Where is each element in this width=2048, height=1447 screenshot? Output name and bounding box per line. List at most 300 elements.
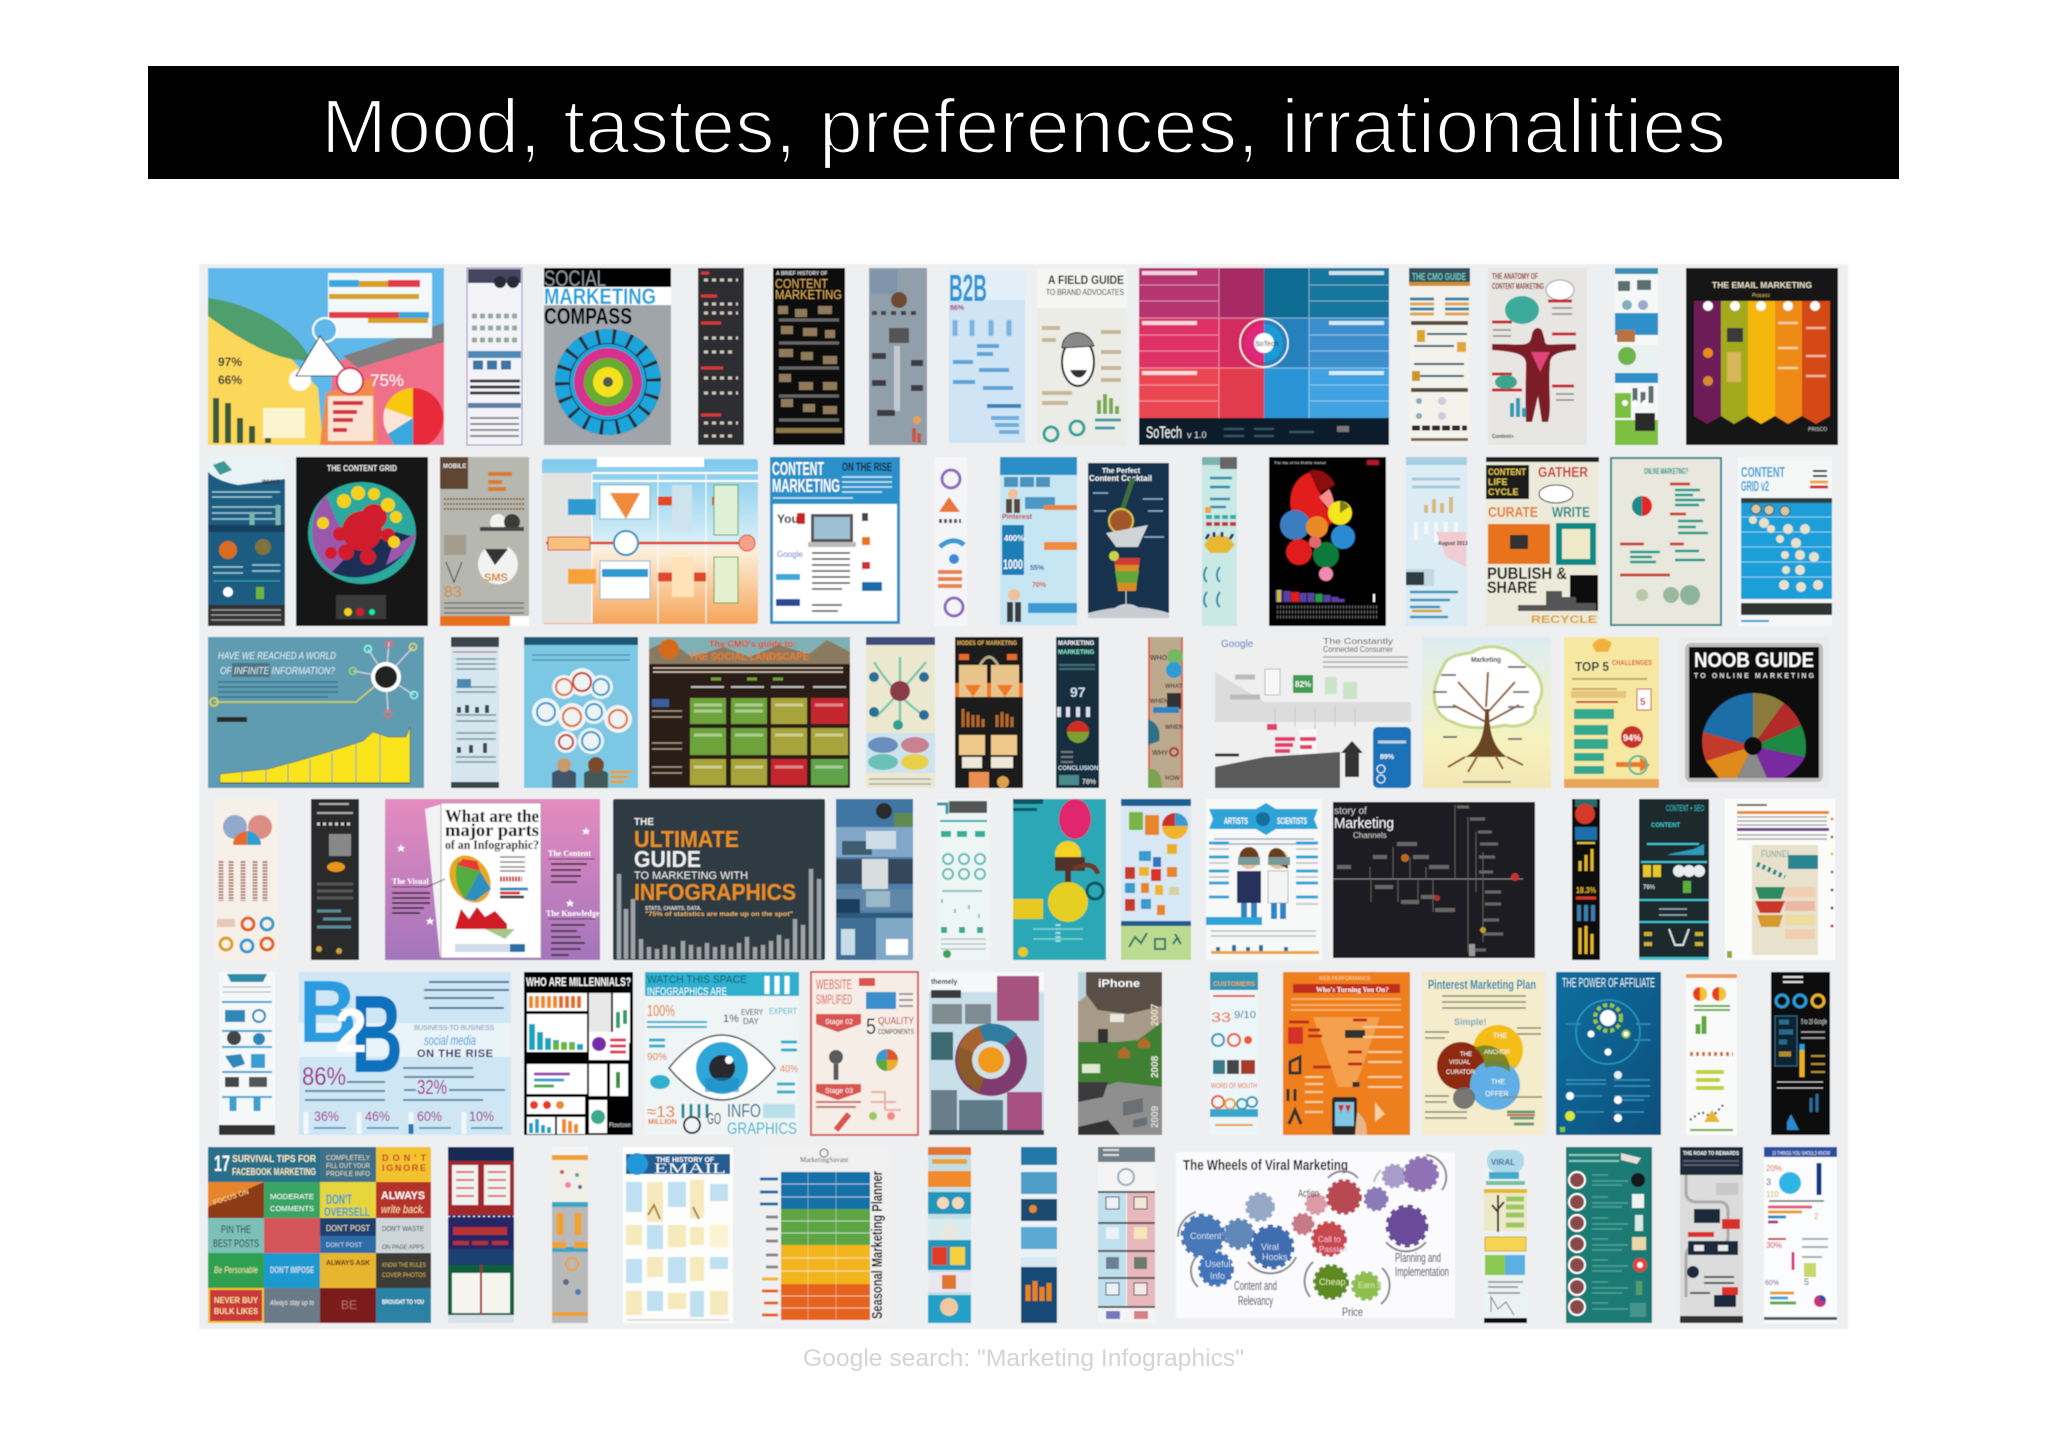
thumbnail: the CMO guide xyxy=(1409,268,1470,445)
thumbnail: SoTech framework: SoTech xyxy=(1146,423,1182,442)
thumbnail: the history of email xyxy=(623,1147,733,1323)
thumbnail: 17 survival tips for facebook marketing: ON PAGE APPS xyxy=(382,1245,424,1251)
thumbnail: content grid v2: GRID v2 xyxy=(1741,478,1769,495)
thumbnail: ultimate guide to marketing with infographics: THE xyxy=(634,817,654,828)
thumbnail: tips for online business xyxy=(1764,1147,1837,1323)
thumbnail: B2B social media tall: 86% xyxy=(950,305,965,312)
thumbnail: pinterest marketing plan xyxy=(1422,972,1545,1135)
thumbnail: mobile marketing: MOBILE xyxy=(443,464,466,470)
thumbnail: 17 survival tips for facebook marketing: PIN THE xyxy=(221,1224,251,1236)
thumbnail: pinterest marketing plan: THE xyxy=(1460,1052,1472,1058)
thumbnail: the constantly connected consumer: Connected Consumer xyxy=(1323,645,1393,654)
thumbnail: 17 survival tips for facebook marketing: NEVER BUY xyxy=(214,1296,259,1305)
thumbnail: the iPhone: 2008 xyxy=(1150,1055,1161,1078)
thumbnail: B2B social media on the rise: 32% xyxy=(417,1077,447,1099)
thumbnail: pale blue data sheet: August 2013 xyxy=(1438,541,1468,547)
thumbnail: web analytics map xyxy=(542,457,758,624)
thumbnail: B2B social media on the rise: B xyxy=(299,962,357,1061)
thumbnail: anatomy of content marketing xyxy=(1488,268,1587,445)
thumbnail: 17 survival tips for facebook marketing: DON'T xyxy=(326,1191,352,1207)
thumbnail: road to rewards xyxy=(1680,1147,1743,1323)
thumbnail: who what when where why: WHEN xyxy=(1165,725,1183,731)
thumbnail: world of infinite information: HAVE WE REACHED A WORLD xyxy=(218,651,336,662)
thumbnail: ultimate guide to marketing with infographics: INFOGRAPHICS xyxy=(634,879,796,905)
thumbnail: watch this space infographics: GO xyxy=(707,1111,721,1128)
thumbnail: 17 survival tips for facebook marketing: DON'T POST xyxy=(326,1224,370,1233)
thumbnail: how social is b2b: 400% xyxy=(1004,534,1024,543)
thumbnail: the wheels of viral marketing: The Wheels of Viral Marketing xyxy=(1183,1157,1348,1174)
thumbnail: 17 survival tips for facebook marketing: KNOW THE RULES xyxy=(382,1263,426,1269)
thumbnail: 17 survival tips for facebook marketing: Always stay up to xyxy=(269,1300,314,1307)
thumbnail: mobile marketing: SMS xyxy=(484,572,508,584)
thumbnail: what are the major parts of an infographic xyxy=(385,799,600,960)
thumbnail: watch this space infographics: 100% xyxy=(647,1003,675,1020)
thumbnail: watch this space infographics: 40% xyxy=(780,1064,798,1075)
thumbnail: B2B social media on the rise: 60% xyxy=(417,1108,442,1124)
thumbnail: slate blue infographic xyxy=(869,268,927,445)
thumbnail: the constantly connected consumer: Google xyxy=(1221,639,1254,650)
thumbnail: 17 survival tips for facebook marketing: BULK LIKES xyxy=(214,1307,259,1316)
thumbnail: themely content wheel: themely xyxy=(931,979,958,986)
thumbnail: 17 survival tips for facebook marketing: MODERATE xyxy=(270,1194,314,1201)
thumbnail: Social Marketing Compass: COMPASS xyxy=(544,303,632,329)
thumbnail: seasonal marketing planner xyxy=(760,1147,892,1323)
thumbnail: the wheels of viral marketing: Price xyxy=(1342,1305,1363,1319)
thumbnail: the constantly connected consumer xyxy=(1215,637,1411,788)
thumbnail: website simplified: WEBSITE xyxy=(816,976,852,992)
thumbnail: who what when where why: WHO xyxy=(1150,655,1168,662)
thumbnail: narrow blue data xyxy=(1021,1147,1057,1323)
thumbnail: watch this space infographics: 1% xyxy=(723,1013,739,1025)
thumbnail: watch this space infographics: 90% xyxy=(647,1052,667,1063)
thumbnail: content life cycle: CURATE xyxy=(1488,504,1538,521)
thumbnail: the wheels of viral marketing: Action xyxy=(1298,1188,1319,1200)
thumbnail: what are the major parts of an infographic: The Content xyxy=(548,849,591,858)
thumbnail: who's turning you on xyxy=(1283,972,1410,1135)
thumbnail: narrow dark yellow bars: 18.3% xyxy=(1576,886,1596,895)
thumbnail: artists vs scientists: ARTISTS xyxy=(1224,816,1248,826)
thumbnail: content marketing on the rise: CONTENT xyxy=(772,459,824,479)
thumbnail: the perfect content cocktail: Content Cocktail xyxy=(1089,474,1152,483)
thumbnail: B2B social media on the rise: social media xyxy=(424,1032,476,1048)
thumbnail: purple bordered infographic xyxy=(467,268,522,445)
thumbnail: 17 survival tips for facebook marketing: DON'T xyxy=(382,1153,426,1163)
thumbnail: internet data dark xyxy=(1056,637,1099,788)
thumbnail: black bubble pies xyxy=(1269,457,1386,626)
thumbnail: website simplified xyxy=(811,972,918,1135)
thumbnail: the email marketing process: Process xyxy=(1752,293,1771,299)
thumbnail: content + seo xyxy=(1639,799,1709,960)
thumbnail: narrow dark yellow bars xyxy=(1572,799,1600,960)
thumbnail: tips for online business: 110 xyxy=(1766,1190,1779,1199)
thumbnail: content marketing on the rise: Google xyxy=(777,550,803,559)
thumbnail: top 5 challenges: 94% xyxy=(1623,733,1641,743)
thumbnail: content + seo: 76% xyxy=(1643,885,1656,891)
thumbnail: history of marketing channels: Marketing xyxy=(1334,815,1394,832)
thumbnail: who are millennials xyxy=(524,972,633,1135)
thumbnail: 17 survival tips for facebook marketing: ALWAYS ASK xyxy=(326,1260,370,1267)
thumbnail: what are the major parts of an infographic: of an Infographic? xyxy=(445,837,539,852)
thumbnail: anatomy of content marketing: THE ANATOMY OF xyxy=(1492,272,1538,281)
thumbnail: the constantly connected consumer: The Constantly xyxy=(1323,637,1393,646)
thumbnail: watch this space infographics: INFO xyxy=(727,1101,761,1121)
thumbnail: top 5 challenges: TOP 5 xyxy=(1575,659,1609,674)
thumbnail: anatomy of content marketing: CONTENT MARKETING xyxy=(1492,282,1544,291)
thumbnail: marketing trifecta: 75% xyxy=(370,371,404,390)
thumbnail: ultimate guide to marketing with infographics: STATS. CHARTS. DATA. xyxy=(645,906,702,912)
thumbnail: Social Marketing Compass xyxy=(544,266,671,445)
thumbnail: CMO's guide to the social landscape: THE SOCIAL LANDSCAPE xyxy=(689,651,809,663)
thumbnail: 17 survival tips for facebook marketing: BROUGHT TO YOU xyxy=(382,1300,424,1306)
thumbnail: field guide to brand advocates: A FIELD GUIDE xyxy=(1048,273,1124,287)
thumbnail: anatomy of content marketing: Content+ xyxy=(1492,434,1514,440)
thumbnail: the wheels of viral marketing: Hooks xyxy=(1262,1252,1288,1262)
thumbnail: the perfect content cocktail xyxy=(1088,463,1169,618)
thumbnail: ultimate guide to marketing with infographics: "75% of statistics are made up on the spot" xyxy=(645,912,793,918)
thumbnail: website simplified: COMPONENTS xyxy=(878,1029,914,1036)
thumbnail: field guide to brand advocates xyxy=(1037,268,1127,445)
thumbnail: internet data dark: 97 xyxy=(1070,684,1086,700)
thumbnail: the constantly connected consumer: 82% xyxy=(1295,680,1311,689)
thumbnail: the email marketing process: THE EMAIL MARKETING xyxy=(1712,281,1812,290)
thumbnail: who what when where why: WHAT xyxy=(1165,684,1183,690)
thumbnail: 17 survival tips for facebook marketing: DON'T IMPOSE xyxy=(270,1265,314,1275)
thumbnail: watch this space infographics: ≈13 xyxy=(647,1104,675,1121)
thumbnail: who's turning you on: Who's Turning You On? xyxy=(1316,986,1389,994)
thumbnail: tips for online business: 30% xyxy=(1766,1241,1782,1250)
thumbnail: pinterest marketing plan: Simple! xyxy=(1454,1017,1487,1027)
thumbnail: ultimate guide to marketing with infographics: GUIDE xyxy=(634,846,701,872)
thumbnail: 17 survival tips for facebook marketing: BEST POSTS xyxy=(213,1238,259,1250)
thumbnail: the iPhone: 2007 xyxy=(1150,1003,1161,1026)
thumbnail: 17 survival tips for facebook marketing: IGNORE xyxy=(382,1163,426,1173)
thumbnail: content life cycle xyxy=(1486,457,1599,626)
thumbnail: SoTech framework: v 1.0 xyxy=(1187,430,1207,440)
thumbnail: website simplified: QUALITY xyxy=(878,1016,914,1027)
thumbnail: email marketing guide xyxy=(451,637,499,788)
thumbnail: who what when where why: WHY xyxy=(1152,750,1169,757)
thumbnail: why blue ocean: WHY? xyxy=(262,480,280,486)
thumbnail: the iPhone: 2009 xyxy=(1150,1105,1161,1128)
thumbnail: 17 survival tips for facebook marketing: DON'T POST xyxy=(326,1243,362,1249)
thumbnail: the wheels of viral marketing: Useful xyxy=(1205,1259,1231,1269)
thumbnail: watch this space infographics: GRAPHICS xyxy=(727,1119,797,1138)
thumbnail: the wheels of viral marketing: Passion xyxy=(1319,1245,1347,1254)
thumbnail: B2B social media tall: B2B xyxy=(949,268,987,310)
thumbnail: tips for online business: 10 THINGS YOU SHOULD KNOW xyxy=(1772,1151,1830,1157)
thumbnail: content life cycle: WRITE xyxy=(1552,504,1590,521)
thumbnail: narrow aqua xyxy=(1202,457,1237,626)
thumbnail: top 5 challenges: CHALLENGES xyxy=(1612,660,1652,667)
thumbnail: 17 survival tips for facebook marketing: COVER PHOTOS xyxy=(382,1273,426,1279)
thumbnail: marketing trifecta: 66% xyxy=(218,373,242,387)
thumbnail: B2B social media tall xyxy=(949,268,1025,443)
thumbnail: pinterest marketing plan: CURATOR xyxy=(1446,1070,1476,1076)
thumbnail: noob guide to online marketing: NOOB GUIDE xyxy=(1694,649,1814,672)
thumbnail: black bubble pies: The rise of the Mobile market xyxy=(1274,460,1327,465)
thumbnail: the wheels of viral marketing: Content xyxy=(1190,1231,1222,1241)
thumbnail: the wheels of viral marketing: Call to xyxy=(1318,1235,1341,1244)
thumbnail: seasonal marketing planner: Seasonal Marketing Planner xyxy=(869,1171,886,1319)
thumbnail: history of content marketing: MARKETING xyxy=(775,287,842,302)
thumbnail: black data rings xyxy=(1771,972,1830,1135)
thumbnail: history of marketing channels xyxy=(1333,802,1535,958)
thumbnail: what are the major parts of an infographic: The Visual xyxy=(392,877,429,886)
thumbnail: atoms data xyxy=(866,637,935,788)
thumbnail: content marketing on the rise: ON THE RISE xyxy=(842,460,892,474)
thumbnail: ultimate guide to marketing with infographics xyxy=(613,799,825,960)
thumbnail: content life cycle: PUBLISH & xyxy=(1487,564,1567,583)
thumbnail: content life cycle: CONTENT xyxy=(1488,467,1526,477)
thumbnail: history of content marketing xyxy=(773,268,845,445)
thumbnail: 17 survival tips for facebook marketing xyxy=(208,1147,431,1323)
thumbnail: blue photo collage xyxy=(836,799,913,960)
thumbnail: tips for online business: 60% xyxy=(1765,1280,1779,1287)
thumbnail: noob guide to online marketing: TO ONLINE MARKETING xyxy=(1694,673,1815,680)
thumbnail: colorful data xyxy=(215,799,278,960)
thumbnail: how social is b2b: 55% xyxy=(1030,565,1045,572)
thumbnail: internet data dark: 78% xyxy=(1082,779,1096,786)
thumbnail: 17 survival tips for facebook marketing: PROFILE INFO xyxy=(326,1171,370,1178)
thumbnail: what are the major parts of an infographic: The Knowledge xyxy=(546,909,600,918)
thumbnail: 17 survival tips for facebook marketing: write back. xyxy=(381,1204,425,1216)
thumbnail: 17 survival tips for facebook marketing: OVERSELL xyxy=(324,1205,370,1219)
thumbnail: pale blue data sheet xyxy=(1406,457,1468,626)
thumbnail: 17 survival tips for facebook marketing: COMPLETELY xyxy=(326,1155,370,1162)
thumbnail: history of content marketing: CONTENT xyxy=(775,276,828,291)
thumbnail: narrow purple rings xyxy=(934,457,967,626)
thumbnail: website simplified: Stage 03 xyxy=(825,1088,853,1095)
thumbnail: history of content marketing: A BRIEF HISTORY OF xyxy=(776,271,827,277)
thumbnail: internet marketing tree: Marketing xyxy=(1471,657,1501,664)
thumbnail: who what when where why: HOW xyxy=(1165,776,1180,782)
thumbnail: going viral: VIRAL xyxy=(1491,1158,1515,1167)
thumbnail: customer word of mouth: CUSTOMERS xyxy=(1213,982,1255,988)
thumbnail: the wheels of viral marketing: Info xyxy=(1210,1271,1225,1281)
thumbnail: watch this space infographics: EVERY xyxy=(741,1008,764,1017)
thumbnail: internet marketing tree xyxy=(1423,637,1551,788)
thumbnail: B2B social media on the rise: 86% xyxy=(302,1063,346,1091)
thumbnail: inbound marketing teal xyxy=(1013,799,1106,960)
thumbnail: content marketing the game xyxy=(1121,799,1191,960)
thumbnail: the wheels of viral marketing: Cheap xyxy=(1319,1277,1346,1287)
thumbnail: content grid v2: CONTENT xyxy=(1741,464,1785,481)
thumbnail: the email marketing process xyxy=(1686,268,1838,445)
thumbnail: the CMO guide: THE CMO GUIDE xyxy=(1412,272,1466,283)
thumbnail: marketing trifecta: 97% xyxy=(218,355,242,369)
thumbnail: B2B social media on the rise: BUSINESS-TO-BUSINESS xyxy=(414,1025,494,1032)
thumbnail: the email marketing process: PRISCO xyxy=(1808,427,1827,433)
thumbnail: dark timeline xyxy=(698,268,744,445)
thumbnail: black data rings: 5 to 20 Google xyxy=(1801,1019,1827,1026)
thumbnail: world of infinite information xyxy=(208,637,424,788)
thumbnail: the wheels of viral marketing: Viral xyxy=(1261,1242,1279,1252)
thumbnail: themely content wheel xyxy=(929,972,1044,1135)
thumbnail: CMO's guide to the social landscape: The CMO's guide to: xyxy=(709,639,796,649)
title bar xyxy=(148,66,1899,179)
thumbnail: tips for online business: 2 xyxy=(1814,1212,1819,1221)
thumbnail: pinterest marketing plan: OFFER xyxy=(1485,1091,1509,1098)
thumbnail: content life cycle: LIFE xyxy=(1488,477,1508,487)
thumbnail: internet data dark: MARKETING xyxy=(1058,641,1095,647)
thumbnail: narrow grey with orange xyxy=(552,1147,588,1323)
thumbnail: the wheels of viral marketing: Planning and xyxy=(1395,1250,1441,1265)
thumbnail: teal bordered data: ONLINE MARKETING? xyxy=(1644,467,1688,476)
thumbnail: watch this space infographics: EXPERT xyxy=(769,1007,797,1016)
thumbnail: the perfect content cocktail: The Perfect xyxy=(1102,468,1141,475)
thumbnail: content life cycle: SHARE xyxy=(1487,578,1537,597)
panel: Google image results grid xyxy=(199,264,1848,1329)
thumbnail: pinterest marketing plan: VISUAL xyxy=(1449,1060,1471,1066)
thumbnail: top 5 challenges: 5 xyxy=(1640,697,1646,708)
thumbnail: 17 survival tips for facebook marketing: SURVIVAL TIPS FOR xyxy=(232,1154,317,1165)
thumbnail: who are millennials: WHO ARE MILLENNIALS? xyxy=(526,975,631,989)
thumbnail: inside the minds xyxy=(524,637,638,788)
thumbnail: website simplified: Stage 02 xyxy=(825,1019,853,1026)
thumbnail: B2B social media on the rise: 36% xyxy=(314,1108,339,1124)
thumbnail: customer word of mouth: 33 xyxy=(1211,1009,1231,1025)
thumbnail: the history of email: THE HISTORY OF xyxy=(656,1157,715,1164)
thumbnail: customer word of mouth xyxy=(1210,972,1258,1135)
thumbnail: pinterest marketing plan: THE xyxy=(1491,1079,1505,1086)
thumbnail: customer word of mouth: WORD OF MOUTH xyxy=(1211,1083,1257,1090)
thumbnail: field guide to brand advocates: TO BRAND ADVOCATES xyxy=(1046,288,1124,297)
thumbnail: content marketing on the rise: You xyxy=(777,512,799,526)
thumbnail: how social is b2b: 1000 xyxy=(1003,556,1023,572)
thumbnail: Social Marketing Compass: MARKETING xyxy=(544,284,656,309)
thumbnail: noob guide to online marketing xyxy=(1679,637,1829,788)
thumbnail: content life cycle: CYCLE xyxy=(1488,487,1519,497)
thumbnail: watch this space infographics: INFOGRAPHICS ARE xyxy=(647,986,727,998)
thumbnail: content + seo: CONTENT + SEO xyxy=(1666,804,1704,813)
thumbnail: 17 survival tips for facebook marketing: 17 xyxy=(214,1151,230,1176)
thumbnail: how social is b2b: Pinterest xyxy=(1002,514,1033,521)
thumbnail: 17 survival tips for facebook marketing: COMMENTS xyxy=(270,1206,314,1213)
thumbnail: pinterest marketing plan: ANCHOR xyxy=(1484,1050,1511,1056)
thumbnail: the content grid: THE CONTENT GRID xyxy=(327,464,397,473)
thumbnail: teal bordered data xyxy=(1611,458,1721,625)
thumbnail: watch this space infographics: MILLION xyxy=(648,1119,677,1126)
thumbnail: pinterest marketing plan: THE xyxy=(1493,1033,1507,1040)
thumbnail: the iPhone xyxy=(1078,972,1162,1135)
thumbnail: the wheels of viral marketing xyxy=(1176,1152,1455,1319)
thumbnail: 17 survival tips for facebook marketing: FACEBOOK MARKETING xyxy=(232,1167,316,1178)
thumbnail: pale teal xyxy=(937,799,990,960)
thumbnail: white charts xyxy=(1686,972,1737,1135)
thumbnail: watch this space infographics: DAY xyxy=(743,1017,760,1026)
thumbnail: ultimate guide to marketing with infographics: ULTIMATE xyxy=(634,826,739,852)
thumbnail: how social is b2b: 70% xyxy=(1032,582,1047,589)
thumbnail: who what when where why: WHEN xyxy=(1150,699,1168,705)
thumbnail: modes of marketing: MODES OF MARKETING xyxy=(957,641,1017,647)
thumbnail: the wheels of viral marketing: Earn $ xyxy=(1358,1281,1382,1290)
thumbnail: what are the major parts of an infographic: major parts xyxy=(445,820,539,840)
thumbnail: the power of affiliate xyxy=(1556,972,1661,1135)
thumbnail: funnel marketing model: FUNNEL xyxy=(1761,849,1791,859)
thumbnail: the history of email: EMAIL xyxy=(654,1161,726,1177)
thumbnail: watch this space infographics xyxy=(645,972,799,1138)
thumbnail: CMO's guide to the social landscape xyxy=(649,637,850,788)
thumbnail: website simplified: SIMPLIFIED xyxy=(816,991,852,1007)
thumbnail: history of marketing channels: story of xyxy=(1334,806,1367,817)
thumbnail: artists vs scientists xyxy=(1206,799,1322,960)
thumbnail: why blue ocean xyxy=(208,457,285,626)
heading: What are the xyxy=(445,806,539,826)
thumbnail: split blue pink comparison xyxy=(1098,1147,1155,1323)
thumbnail: B2B social media on the rise: 46% xyxy=(365,1108,390,1124)
thumbnail: content life cycle: GATHER xyxy=(1538,464,1588,481)
thumbnail: 17 survival tips for facebook marketing: DON'T WASTE xyxy=(382,1226,424,1233)
thumbnail: narrow orange teal xyxy=(928,1147,971,1323)
thumbnail: who are millennials: Flowtown xyxy=(609,1123,631,1129)
thumbnail: watch this space infographics: WATCH THIS SPACE xyxy=(647,974,747,986)
thumbnail: mobile marketing xyxy=(440,457,529,626)
thumbnail: website simplified: 5 xyxy=(866,1014,876,1039)
thumbnail: the wheels of viral marketing: Relevancy xyxy=(1238,1293,1273,1308)
thumbnail: artists vs scientists: SCIENTISTS xyxy=(1277,816,1307,826)
thumbnail: 17 survival tips for facebook marketing: Be Personable xyxy=(214,1265,258,1275)
thumbnail: content marketing on the rise xyxy=(770,457,900,624)
thumbnail: content + seo: CONTENT xyxy=(1651,823,1680,829)
thumbnail: content marketing on the rise: MARKETING xyxy=(772,476,840,496)
thumbnail: teal timeline circles xyxy=(1566,1147,1652,1323)
thumbnail: going viral xyxy=(1484,1147,1527,1323)
thumbnail: 17 survival tips for facebook marketing: ALWAYS xyxy=(381,1190,425,1202)
thumbnail: Social Marketing Compass: SOCIAL xyxy=(544,266,606,291)
thumbnail: dark infographic with orange xyxy=(311,799,359,960)
thumbnail: who what when where why xyxy=(1148,637,1183,788)
thumbnail: B2B social media on the rise: 10% xyxy=(469,1108,494,1124)
thumbnail: the power of affiliate: THE POWER OF AFFILIATE xyxy=(1562,975,1655,990)
thumbnail: marketing trifecta xyxy=(208,268,444,445)
thumbnail: blue survey xyxy=(219,972,275,1135)
thumbnail: modes of marketing xyxy=(955,637,1023,788)
thumbnail: tips for online business: 3 xyxy=(1766,1177,1771,1187)
thumbnail: how social is b2b xyxy=(1000,457,1077,625)
thumbnail: 17 survival tips for facebook marketing: BE xyxy=(341,1298,357,1312)
thumbnail: SoTech framework: SoTech xyxy=(1255,341,1278,348)
thumbnail: road to rewards: THE ROAD TO REWARDS xyxy=(1683,1151,1740,1157)
thumbnail: mobile marketing: 83 xyxy=(444,584,462,601)
thumbnail: B2B social media on the rise xyxy=(299,962,511,1135)
thumbnail: content life cycle: RECYCLE xyxy=(1531,614,1597,626)
thumbnail: the content grid xyxy=(296,457,428,626)
thumbnail: internet data dark: MARKETING xyxy=(1058,650,1095,656)
thumbnail: pinterest marketing plan: Pinterest Marketing Plan xyxy=(1428,977,1536,992)
thumbnail: ultimate guide to marketing with infographics: TO MARKETING WITH xyxy=(634,870,748,882)
thumbnail: history of marketing channels: Channels xyxy=(1353,831,1387,840)
thumbnail: world of infinite information: OF INFINITE INFORMATION? xyxy=(220,666,335,677)
thumbnail: tips for online business: 20% xyxy=(1766,1164,1782,1173)
thumbnail: green and blue tall xyxy=(1615,268,1658,445)
thumbnail: seasonal marketing planner: MarketingSavant xyxy=(800,1156,848,1164)
title: Mood, tastes, preferences, irrationalities xyxy=(321,84,1726,170)
thumbnail: top 5 challenges xyxy=(1564,637,1659,788)
thumbnail: the constantly connected consumer: 89% xyxy=(1380,754,1395,761)
thumbnail: internet data dark: CONCLUSION xyxy=(1058,766,1098,772)
thumbnail: customer word of mouth: 9/10 xyxy=(1234,1010,1256,1021)
caption: Google search: "Marketing Infographics" xyxy=(803,1345,1244,1372)
thumbnail: the wheels of viral marketing: Implementation xyxy=(1395,1264,1449,1279)
thumbnail: content grid v2 xyxy=(1738,457,1832,626)
thumbnail: B2B social media on the rise: ON THE RISE xyxy=(417,1048,493,1060)
thumbnail: who's turning you on: WEB PERFORMANCE xyxy=(1319,976,1371,982)
thumbnail: funnel marketing model xyxy=(1725,799,1835,960)
thumbnail: the iPhone: iPhone xyxy=(1098,978,1140,990)
thumbnail: navy red green poster xyxy=(448,1147,514,1323)
thumbnail: B2B social media on the rise: B xyxy=(351,973,403,1096)
thumbnail: 17 survival tips for facebook marketing: FILL OUT YOUR xyxy=(326,1163,370,1170)
